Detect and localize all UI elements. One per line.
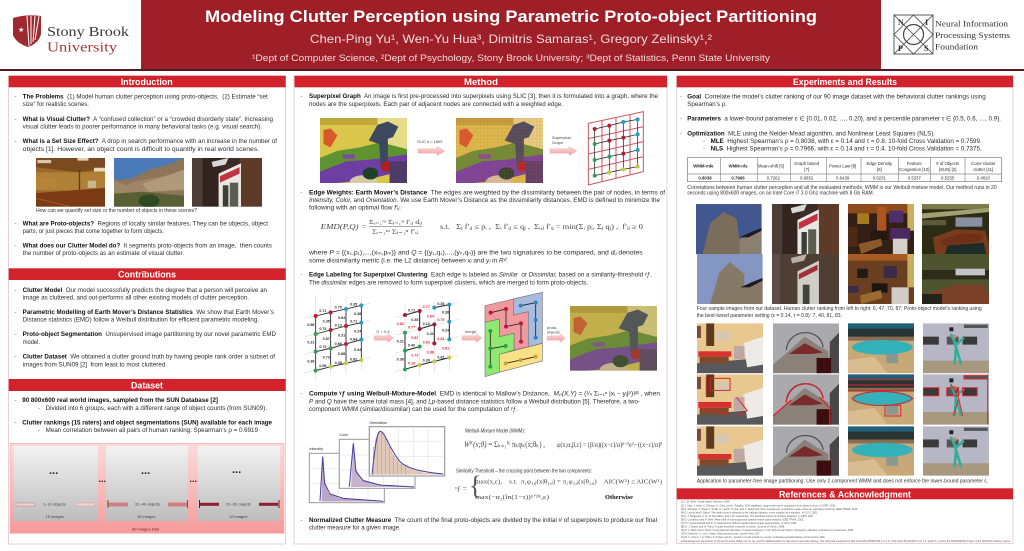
heading: Contributions: Contributions	[118, 270, 176, 281]
arrow: threshold	[374, 329, 393, 343]
diagram: thresholded graph: 0.81	[442, 346, 449, 350]
text: clutter dataset: images from SUN09 [2] from least to most cluttered.	[23, 362, 167, 368]
text: signatures: where P = {(x₁,p₁),...,(xₘ,pₘ)} and Q = {(y₁,q₁),...,(yₙ,qₙ)} are the two signatures to be compared, and dᵢⱼ denotes	[308, 251, 643, 257]
text: edge weights: -	[300, 191, 302, 197]
panel: contributions	[9, 268, 286, 368]
diagram: thresholded graph: 0.84	[427, 315, 435, 319]
text: goal: -	[680, 95, 682, 101]
diagram: weighted graph: 0.73	[319, 327, 326, 331]
text: clutter model: -	[14, 288, 16, 294]
table: correlations: clutter [11]	[973, 167, 993, 172]
text: reference list	[681, 500, 1011, 543]
diagram: thresholded graph: 0.62	[437, 355, 444, 359]
text: parametric modelling: Distance statistics (EMD) follow a Weibull distribution for efficient parametric modeling.	[23, 318, 259, 324]
diagram: weighted graph: 0.66	[335, 342, 342, 346]
icon: NIPS emblem: S	[924, 44, 929, 53]
table: correlations: 0.5337	[908, 175, 922, 180]
caption: application: Application to parameter-free image partitioning: Use only 2-component WMM and does not enforce the lower-bound parameter ε.	[697, 478, 988, 484]
text: reference list: [1] J. M. Wolfe. Visual search. Attention, 1998.	[681, 500, 730, 504]
text: parameters: -	[680, 117, 682, 123]
text: rankings: -	[38, 428, 40, 434]
image: storefront	[192, 158, 262, 207]
text: images	[14, 398, 267, 412]
diagram: weighted graph: 0.64	[350, 337, 358, 341]
text: segmentation: model.	[23, 340, 40, 346]
heading: References and Acknowledgment	[677, 488, 1013, 500]
panel: references	[677, 488, 1013, 543]
diagram: dataset groups	[10, 443, 284, 533]
table: correlations: Congestion [10]	[899, 167, 929, 172]
text: set size effect	[14, 139, 277, 153]
formula: similarity threshold: ᵞƒ =	[455, 484, 467, 493]
text: normalized clutter measure: -	[300, 518, 302, 524]
text: superpixel graph: Superpixel Graph An image is first pre-processed into superpixels using SLIC [3], then it is formulated into a graph, where the	[309, 94, 659, 100]
table: correlations: 0.5255	[941, 175, 955, 180]
card: 51-60 objects: 15 images	[229, 514, 247, 519]
icon: NIPS emblem	[894, 15, 933, 54]
diagram: weighted graph	[305, 295, 370, 380]
text: model: What does our Clutter Model do? It segments proto-objects from an image, then counts	[23, 243, 272, 249]
text: rankings: Mean correlation between all pairs of human ranking: Spearman’s ρ = 0.6919	[46, 428, 259, 434]
logo: Neural Information Processing Systems Foundation: Processing Systems	[935, 30, 1010, 40]
text: optimization: NLS Highest Spearman’s ρ = 0.7966, with ε = 0.14 and τ = 0.4. 10-fold Cross Validation = 0.7375.	[711, 147, 982, 153]
text: set size effect: What is a Set Size Effect? A drop in search performance with an increase in the number of	[23, 139, 277, 145]
arrow: merge	[462, 329, 482, 343]
caption: table	[687, 185, 997, 196]
text: problems: size” for realistic scenes.	[23, 102, 89, 108]
table: correlations: 0.7966	[731, 175, 745, 180]
diagram: thresholded graph: 0.63	[423, 340, 430, 344]
formula: EMD: Σᵢ₌₁ᵐ Σⱼ₌₁ⁿ f′ᵢⱼ dᵢⱼ	[369, 219, 422, 226]
arrow: SLIC	[417, 139, 445, 156]
formula: WMM: φ(x;α,β,c) = (β/α)((x−c)/α)ᵝ⁻¹e^−((x−c)/α)ᵝ	[557, 441, 662, 449]
chart: orientation histogram: Orientation	[369, 421, 387, 425]
text: model: the number of proto-objects as an estimate of visual clutter.	[23, 251, 184, 257]
text: model	[14, 243, 272, 257]
text: images: -	[38, 406, 40, 412]
diagram: thresholded graph: 0.82	[397, 322, 404, 326]
text: parametric modelling: Parametric Modelling of Earth Mover’s Distance Statistics We show that Earth Mover’s	[23, 310, 274, 316]
diagram: weighted graph: 0.72	[319, 345, 326, 349]
diagram: thresholded graph: 0.88	[427, 351, 434, 355]
text: weibull: -	[300, 391, 302, 397]
text: reference list: [9] M. L. Mack and A. Oliva. Computational estimation of visual complexity. In the 12th Annual Object, Perception, Attention, and Memory Conference, 2004.	[681, 528, 854, 532]
diagram: thresholded graph: 0.24	[442, 329, 450, 333]
table: correlations: Feature	[907, 161, 922, 166]
heading: References and Acknowledgment: References & Acknowledgment	[779, 489, 912, 500]
table: correlations: Mean-shift [6]	[758, 164, 784, 169]
formula: similarity threshold	[455, 469, 662, 501]
table: correlations: Graph based	[794, 161, 820, 166]
diagram: weighted graph: 0.62	[350, 358, 357, 362]
text: proto-objects: parts, or just pieces that come together to form objects.	[23, 229, 164, 235]
table: correlations	[687, 158, 1002, 182]
image: gymnasium	[36, 158, 105, 207]
text: rankings: -	[14, 421, 16, 427]
chart: intensity histogram: Intensity	[309, 447, 323, 451]
text: edge weights: following with an optimal flow f′ᵢⱼ:	[309, 206, 401, 212]
text: segmentation: -	[14, 332, 16, 338]
table: correlations: [7]	[804, 167, 809, 172]
text: edge weights: Edge Weights: Earth Mover’s Distance The edges are weighted by the dissimilarity between the pair of nodes, in terms of	[309, 191, 665, 197]
separators: ...	[98, 474, 106, 484]
formula: WMM: Wᴷ(x;θ) = Σₖ₌₁ᴷ πₖφₖ(x;θₖ) ,	[464, 439, 545, 449]
text: images: Divided into 6 groups, each with a different range of object counts (from SUN09).	[46, 406, 267, 412]
text: clutter model: Clutter Model Our model successfully predicts the degree that a person will perceive an	[23, 288, 267, 294]
authors: Chen-Ping Yu¹, Wen-Yu Hua³, Dimitris Samaras¹, Gregory Zelinsky¹,²	[310, 32, 712, 46]
text: parameters: Parameters a lower-bound parameter ε ∈ {0.01, 0.02, …, 0.20}, and a percentile parameter τ ∈ {0.5, 0.6, …, 0.9}.	[687, 116, 1001, 123]
text: optimization: MLE Highest Spearman’s ρ = 0.8038, with ε = 0.14 and τ = 0.8. 10-fold Cross Validation = 0.7599.	[711, 139, 982, 145]
text: optimization: -	[680, 132, 682, 138]
image: mountain	[114, 158, 184, 207]
table: correlations: 0.6439	[836, 175, 850, 180]
image: playroom	[320, 118, 407, 183]
text: clutter dataset	[14, 355, 275, 368]
text: signatures: some dissimilarity metric (i.e. the L2 distance) between xᵢ and yⱼ in Rᵈ.	[309, 257, 508, 264]
caption: table: Correlations between human clutter perception and all the evaluated methods. WMM is our Weibull mixture model. Our method runs in 20	[687, 185, 997, 191]
text: images: 90 800x600 real world images, sampled from the SUN Database [2]	[22, 398, 218, 404]
diagram: weighted graph: 0.21	[307, 341, 314, 345]
text: optimization	[680, 132, 982, 153]
heading: Experiments and Results: Experiments and Results	[793, 77, 897, 88]
table: correlations: Color-cluster	[971, 161, 996, 166]
text: reference list: [3] R. Achanta, A. Shaji, K. Smith, A. Lucchi, P. Fua, and S. Susstrunk. SLIC superpixels compared to state-of-the-art superpixel methods. IEEE TPAMI, 2012.	[681, 507, 858, 511]
header banner	[0, 0, 1024, 71]
diagram: thresholded graph: 0.71	[408, 308, 415, 312]
diagram: merged clusters	[485, 292, 542, 377]
text: clutter dataset: -	[14, 355, 16, 361]
diagram: weighted graph: 0.31	[338, 334, 345, 338]
text: set size effect: objects [1]. However, an object count is difficult to quantify in real world scenes.	[23, 147, 259, 153]
diagram: weighted graph: 0.38	[307, 359, 314, 363]
heading: Dataset	[9, 379, 286, 392]
heading: Method	[294, 76, 667, 88]
logo: Stony Brook University	[13, 15, 129, 56]
logo: Neural Information Processing Systems Foundation	[894, 15, 1010, 54]
table: correlations: [9]	[877, 167, 882, 172]
text: reference list: [4] E. Levina and P. Bickel. The earth mover’s distance is the mallows distance: some insights from statistics. In ICCV, 2001.	[681, 510, 818, 514]
card: 1-10 objects: 15 images	[46, 514, 64, 519]
text: goal: Spearman’s ρ.	[687, 102, 727, 108]
diagram: thresholded graph: 0.35	[411, 318, 418, 322]
card: 1-10 objects: ...	[49, 465, 58, 477]
text: set size effect: -	[14, 139, 16, 145]
affiliations: ¹Dept of Computer Science, ²Dept of Psychology, Stony Brook University; ³Dept of Statistics, Penn State University	[252, 52, 770, 63]
text: segmentation	[14, 332, 277, 346]
heading: Dataset: Dataset	[131, 381, 164, 392]
text: edge labeling: The dissimilar edges are removed to form superpixel clusters, which are merged to form proto-objects.	[309, 280, 588, 286]
diagram: weighted graph: 0.44	[354, 348, 362, 352]
diagram: thresholded graph: 0.38	[442, 311, 449, 315]
text: optimization: -	[703, 139, 705, 145]
text: reference list: [7] P. F. Felzenszwalb and D. P. Huttenlocher. Efficient graph-based image segmentation. In IJCV, 2004.	[681, 521, 797, 525]
diagram: thresholded graph: 0.40	[408, 343, 415, 347]
text: proto-objects: -	[14, 221, 16, 227]
diagram: thresholded graph: 0.21	[397, 339, 404, 343]
text: superpixel graph	[300, 94, 659, 108]
table: correlations: Power Law [8]	[829, 164, 856, 169]
text: rankings: Clutter rankings (15 raters) and object segmentations (SUN) available for each image	[22, 421, 273, 427]
formula: WMM	[464, 429, 662, 449]
diagram: thresholded graph: 0.38	[397, 357, 404, 361]
text: edge weights: Intensity, Color, and Orientation. We use Earth Mover’s Distance as the dissimilarity distances. EMD is defined to minimize the	[309, 198, 661, 204]
panel: dataset	[9, 379, 286, 533]
caption: table: seconds using 800x600 images, on an Intel Core i7 3.0 Ghz machine with 8 Gb RAM.	[687, 190, 874, 196]
text: problems	[14, 95, 268, 108]
text: signatures	[308, 251, 643, 264]
card: 51-60 objects: ...	[232, 464, 241, 476]
text: clutter model	[14, 288, 267, 302]
chart: color histogram: Color	[339, 433, 349, 437]
text: reference list: [2] J. Xiao, J. Hays, K. Ehinger, A. Oliva, and A. Torralba. SUN database: Large-scale scene recognition from abbey to zoo. In CVPR, 2010.	[681, 503, 836, 507]
text: visual clutter: -	[14, 117, 16, 123]
diagram: weighted graph: 0.88	[338, 352, 345, 356]
diagram: weighted graph: 0.84	[338, 316, 346, 320]
text: visual clutter: visual clutter leads to poorer performance in many behavioral tasks (e.g. visual search).	[23, 125, 262, 131]
diagram: weighted graph: 0.75	[335, 306, 342, 310]
table: correlations: 0.6231	[873, 175, 887, 180]
text: goal: Goal Correlate the model’s clutter ranking of our 90 image dataset with the behavioral clutter rankings using	[687, 95, 986, 101]
caption: samples	[697, 306, 982, 319]
diagram: thresholded graph: 0.16	[408, 362, 415, 366]
formula: similarity threshold: Similarity Threshold – the crossing point between the two components:	[456, 469, 592, 475]
text: reference list: [6] D. Comaniciu and P. Meer. Mean shift: A robust approach toward feature space analysis. IEEE TPAMI, 2002.	[681, 518, 804, 522]
text: proto-objects: What are Proto-objects? Regions of locally similar features. They can be objects, object	[23, 221, 268, 227]
text: weibull: component WMM (similar/dissimilar) can be used for the computation of ᵞƒ.	[309, 407, 518, 413]
formula: EMD: EMD(P,Q) =	[319, 223, 367, 231]
text: reference list: [8] M. J. Bravo and H. Farid. A scale invariant measure of clutter. Journal of Vision, 2008.	[681, 524, 785, 528]
panel: left column	[8, 76, 286, 544]
heading: Contributions	[9, 268, 286, 281]
total label: 90 images total	[132, 526, 159, 532]
arrow: proto-objects: proto-	[547, 325, 558, 330]
formula: similarity threshold: max(−α₁(ln(1−τ))¹ᐟᵝ¹,ε)	[475, 494, 549, 501]
diagram: thresholded graph: 0.77	[408, 325, 415, 329]
text: parametric modelling: -	[14, 310, 16, 316]
chart: intensity histogram	[309, 447, 384, 503]
formula: similarity threshold: {	[469, 471, 481, 500]
arrow: proto-objects	[547, 325, 565, 343]
card: 31-40 objects: 15 images	[137, 514, 155, 519]
diagram: weighted graph: 0.35	[350, 303, 357, 307]
table: correlations: WMM-mle	[693, 164, 714, 169]
chart: color histogram	[339, 433, 415, 488]
icon: shield: ★	[18, 26, 24, 34]
formula: similarity threshold: max(x,ε), s.t. π₁φ₁,ⱼ(x|θ₁,ⱼ) = π₂φ₂,ⱼ(x|θ₂,ⱼ) AIC(W²) ≤ AIC(W¹)	[475, 478, 662, 486]
text: normalized clutter measure: clutter measure for a given image.	[309, 526, 401, 532]
diagram: weighted graph: 0.24	[354, 329, 362, 333]
diagram: thresholded graph: 0.13	[423, 322, 430, 326]
diagram: weighted graph: 0.13	[335, 324, 342, 328]
text: visual clutter	[14, 117, 273, 131]
card: 31-40 objects	[106, 446, 188, 521]
diagram: thresholded graph: 0.77	[423, 305, 430, 309]
text: problems: The Problems (1) Model human clutter perception using proto-objects. (2) Estimate “set	[23, 95, 268, 101]
card: 31-40 objects: 31~40 objects	[135, 502, 160, 506]
arrow: superpixel graph	[550, 135, 577, 156]
formula: EMD	[319, 219, 644, 236]
caption: How can we quantify set size or the number of objects in these scenes?	[36, 208, 197, 214]
panel: method	[294, 76, 667, 544]
table: correlations: 0.6652	[800, 175, 814, 180]
text: reference list: [10] R. Rosenholtz, Y. Li, and L. Nakano. Measuring visual clutter. Journal of Vision, 2007.	[681, 532, 760, 536]
card: 51-60 objects	[198, 446, 280, 521]
table: correlations: Edge Density	[866, 161, 893, 166]
diagram: superpixel grid graph	[588, 112, 643, 185]
logo: Stony Brook University: Stony Brook	[47, 25, 129, 40]
panel: experiments and results	[677, 76, 1013, 543]
text: clutter dataset: Clutter Dataset We obtained a clutter ground truth by having people rank order a subset of	[23, 355, 275, 361]
heading: Introduction	[9, 76, 286, 88]
text: weibull	[300, 390, 660, 413]
card: 1-10 objects	[14, 446, 98, 521]
image grid: sample images	[696, 204, 989, 304]
separators: ...	[190, 474, 197, 484]
image: superpixels	[456, 118, 543, 183]
text: clutter model: image as cluttered, and out-performs all other existing models of clutter perception.	[23, 296, 249, 302]
diagram: thresholded graph: 0.28	[423, 359, 430, 363]
heading: Experiments and Results	[677, 76, 1013, 88]
text: superpixel graph: nodes are the superpixels. Each pair of adjacent nodes are connected with a weighted edge.	[309, 102, 563, 108]
formula: WMM: Weibull-Mixture Model (WMM):	[465, 429, 525, 435]
image grid: application	[697, 323, 989, 476]
text: parametric modelling	[14, 310, 274, 324]
chart: orientation histogram	[369, 421, 445, 476]
logo: Neural Information Processing Systems Foundation: Foundation	[935, 42, 979, 52]
diagram: thresholded graph: 0.81	[437, 337, 444, 341]
text: reference list: [11] M. C. Lohrenz, J. G. Trafton, R. M. Beck, and M. L. Gendron. A model of clutter for complex, multivariate geospatial displays. Human Factors, 2009.	[681, 535, 825, 539]
caption: samples: Four sample images from our dataset. Human clutter ranking from left to right: 6, 47, 70, 87; Proto-object model’s ranking using	[697, 306, 982, 312]
diagram: thresholded graph: 0.35	[437, 302, 444, 306]
text: problems: -	[14, 95, 16, 101]
table: correlations: 0.8038	[698, 175, 712, 180]
diagram: weighted graph: 0.86	[307, 323, 314, 327]
caption: samples: the best-tuned parameter setting (ε = 0.14, τ = 0.8): 7, 40, 81, 83.	[697, 313, 842, 319]
text: normalized clutter measure	[300, 518, 657, 532]
logo: Stony Brook University: University	[47, 41, 117, 56]
diagram: thresholded graph: 0.31	[427, 332, 434, 336]
arrow: merge: merge	[465, 329, 477, 334]
text: superpixel graph: -	[300, 94, 302, 100]
card: 31-40 objects: ...	[141, 465, 150, 477]
separators	[98, 474, 197, 484]
text: segmentation: Proto-object Segmentation Unsupervised image partitioning by our novel parametric EMD	[23, 332, 277, 338]
card: 1-10 objects: 1~10 objects	[43, 502, 66, 506]
text: visual clutter: What is Visual Clutter? A “confused collection” or a “crowded disorderly state”. Increasing	[23, 117, 273, 123]
table: correlations: 0.4810	[977, 175, 991, 180]
text: optimization: -	[703, 147, 705, 153]
text: edge labeling: -	[300, 273, 302, 279]
logo: Neural Information Processing Systems Foundation: Neural Information	[935, 18, 1009, 28]
diagram: weighted graph: 0.38	[354, 312, 361, 316]
text: goal	[680, 95, 986, 108]
diagram: thresholded graph: 0.73	[411, 354, 418, 358]
icon: NIPS emblem: P	[898, 44, 903, 53]
diagram: weighted graph: 0.73	[323, 356, 330, 360]
arrow: superpixel graph: Graph	[552, 140, 563, 145]
diagram: weighted graph: 0.87	[323, 337, 330, 341]
image: proto-object result	[570, 306, 657, 371]
formula: similarity threshold: Otherwise	[605, 494, 633, 501]
card: 51-60 objects: 51~60 objects	[226, 502, 251, 506]
diagram: weighted graph: 0.71	[350, 319, 357, 323]
text: rankings	[14, 421, 273, 434]
diagram: weighted graph: 0.28	[335, 361, 342, 365]
table: correlations: 0.7262	[767, 175, 781, 180]
title: Modeling Clutter Perception using Parametric Proto-object Partitioning	[205, 8, 817, 26]
text: optimization: Optimization MLE using the Nelder-Mead algorithm, and Nonlinear Least Squares (NLS).	[687, 132, 935, 138]
text: model: -	[14, 243, 16, 249]
text: edge labeling: Edge Labeling for Superpixel Clustering Each edge is labeled as Similar or Dissimilar, based on a similarity-threshold ᵞƒ.	[309, 273, 652, 279]
diagram: thresholded graph: 0.87	[411, 336, 418, 340]
icon: NIPS emblem: N	[898, 18, 904, 27]
diagram: thresholded graph: 0.75	[437, 318, 444, 322]
table: correlations: [SUN] [2]	[939, 167, 956, 172]
heading: Method: Method	[464, 77, 498, 88]
diagram: weighted graph: 0.55	[319, 364, 326, 368]
arrow: superpixel graph: Superpixel	[552, 135, 571, 140]
icon: NIPS emblem: I	[925, 18, 928, 27]
text: edge weights	[300, 191, 665, 212]
text: weibull: Compute ᵞƒ using Weibull-Mixture-Model EMD is identical to Mallow’s Distance, Mₚ(X,Y) = (¹⁄ₙ Σᵢ₌₁ⁿ |xᵢ − yᵢ|ᵖ)¹⁄ᵖ , when	[309, 390, 660, 397]
text: images: -	[14, 398, 16, 404]
heading: Introduction: Introduction	[121, 77, 173, 88]
diagram: weighted graph: 0.35	[323, 319, 330, 323]
text: proto-objects	[14, 221, 268, 235]
text: reference list: [5] G. J. Burghouts, A. W. M. Smeulders, and J.-M. Geusebroek. The distribution family of similarity distances. In NIPS, 2007.	[681, 514, 814, 518]
panel: introduction	[9, 76, 286, 257]
diagram: weighted graph: 0.71	[319, 309, 326, 313]
text: normalized clutter measure: Normalized Clutter Measure The count of the final proto-objects are divided by the initial # of superpixels to produce our final	[309, 518, 657, 524]
arrow: threshold: ᵞƒ = 0.4	[376, 329, 390, 334]
arrow: proto-objects: objects	[547, 330, 560, 334]
diagram: thresholded graph	[395, 302, 458, 380]
text: weibull: P and Q have the same total mass [4], and Lp-based distance statistics follow a Weibull distribution [5]. Therefore, a two-	[309, 399, 640, 405]
text: edge labeling	[300, 273, 652, 286]
table: correlations: # of Objects	[936, 161, 959, 166]
formula: EMD: Σᵢ₌₁ᵐ Σⱼ₌₁ⁿ f′ᵢⱼ	[372, 228, 418, 236]
arrow: SLIC: SLIC k = 1800	[417, 139, 443, 144]
table: correlations: WMM-nls	[728, 164, 748, 169]
formula: EMD: s.t. Σⱼ f′ᵢⱼ ≤ pᵢ , Σᵢ f′ᵢⱼ ≤ qⱼ , Σᵢ,ⱼ f′ᵢⱼ = min(Σᵢ pᵢ, Σⱼ qⱼ) , f′ᵢⱼ ≥ 0	[440, 223, 644, 231]
